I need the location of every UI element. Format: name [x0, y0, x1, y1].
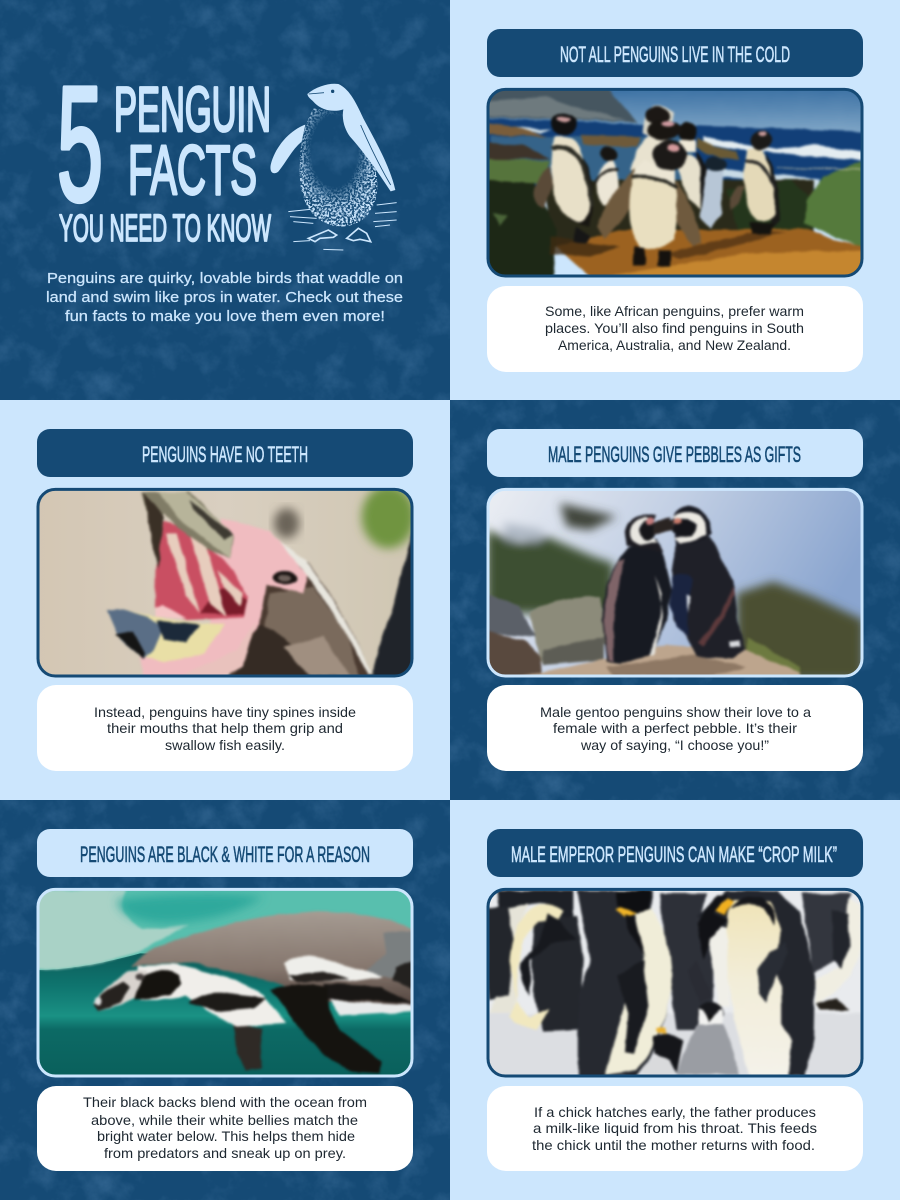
panel: penguins are black and white for a reason [0, 800, 450, 1200]
front penguin [597, 168, 635, 238]
right large penguin [697, 891, 815, 1077]
rear flipper [233, 1024, 263, 1071]
text card: their mouths that help them grip and [107, 721, 343, 736]
left penguin [533, 165, 552, 208]
left large penguin [577, 890, 672, 1077]
head [93, 970, 153, 1010]
text card: places. You’ll also find penguins in South [545, 321, 804, 336]
lower beak [144, 614, 224, 663]
panel: male penguins give pebbles as gifts [450, 400, 900, 800]
chick [677, 1022, 738, 1075]
title: FACTS [128, 131, 257, 209]
front flipper [270, 984, 382, 1073]
photo: african penguins on a beach [486, 88, 864, 278]
intro text: Penguins are quirky, lovable birds that waddle on [47, 270, 403, 287]
penguin left flipper [270, 125, 305, 173]
text card: above, while their white bellies match the [91, 1113, 358, 1128]
penguin head and back flipper [307, 84, 395, 191]
mouth spines [165, 533, 243, 617]
text card [487, 685, 863, 771]
text card [37, 685, 413, 771]
heading [487, 29, 863, 77]
photo: two penguins on a rock [486, 488, 864, 678]
title [57, 52, 272, 250]
right penguin [672, 537, 745, 658]
upper beak [142, 491, 234, 559]
pink face [140, 517, 307, 677]
photo: emperor penguins with chick [486, 888, 864, 1078]
body back [130, 911, 413, 1007]
text card: a milk-like liquid from his throat. This feeds [533, 1121, 817, 1136]
far left penguins [487, 904, 520, 1000]
photo: penguin swimming underwater [36, 888, 414, 1078]
heading [487, 829, 863, 877]
penguin feet and ground [308, 228, 371, 242]
center back penguin [660, 893, 713, 1030]
icon: penguin illustration [270, 84, 397, 250]
text card [37, 1086, 413, 1171]
lower left chick and adult [653, 1033, 683, 1073]
heading [37, 429, 413, 477]
text card: way of saying, “I choose you!” [580, 738, 769, 753]
text card: swallow fish easily. [165, 738, 285, 753]
text card: Male gentoo penguins show their love to a [540, 705, 811, 720]
intro text [46, 270, 403, 325]
panel: not all penguins live in the cold [486, 29, 864, 372]
small penguin [597, 160, 618, 206]
title: PENGUIN [114, 75, 271, 145]
black markings [188, 993, 267, 1012]
penguin body speckles [300, 108, 377, 227]
text card: bright water below. This helps them hide [97, 1129, 355, 1144]
heading [37, 829, 413, 877]
left penguin [602, 543, 672, 663]
text card: Their black backs blend with the ocean from [83, 1095, 367, 1110]
text card [487, 286, 863, 372]
dark wing [370, 532, 410, 674]
text card: female with a perfect pebble. It’s their [553, 721, 798, 736]
back penguins [694, 150, 708, 202]
text card: America, Australia, and New Zealand. [558, 338, 791, 353]
title: 5 [57, 52, 103, 235]
far right penguin [802, 893, 860, 973]
eye [273, 571, 297, 584]
heading [487, 429, 863, 477]
title: YOU NEED TO KNOW [59, 208, 271, 250]
intro text: land and swim like pros in water. Check out these [46, 289, 403, 306]
rock [522, 643, 802, 674]
white shoulder [285, 956, 383, 982]
text card [487, 1086, 863, 1171]
text card: If a chick hatches early, the father produces [534, 1105, 816, 1120]
text card: Instead, penguins have tiny spines inside [94, 705, 356, 720]
panel: penguins have no teeth [36, 429, 414, 771]
photo: penguin with open beak [36, 488, 414, 678]
head feathers [228, 561, 374, 674]
text card: from predators and sneak up on prey. [104, 1146, 346, 1161]
panel: title and intro [0, 0, 450, 400]
right penguin [730, 186, 744, 211]
white belly [137, 965, 287, 1027]
text card: the chick until the mother returns with food. [532, 1138, 815, 1153]
mouth interior [155, 520, 247, 620]
intro text: fun facts to make you love them even more! [65, 308, 385, 325]
panel: male emperor penguins can make crop milk [486, 829, 864, 1171]
text card: Some, like African penguins, prefer warm [545, 304, 804, 319]
